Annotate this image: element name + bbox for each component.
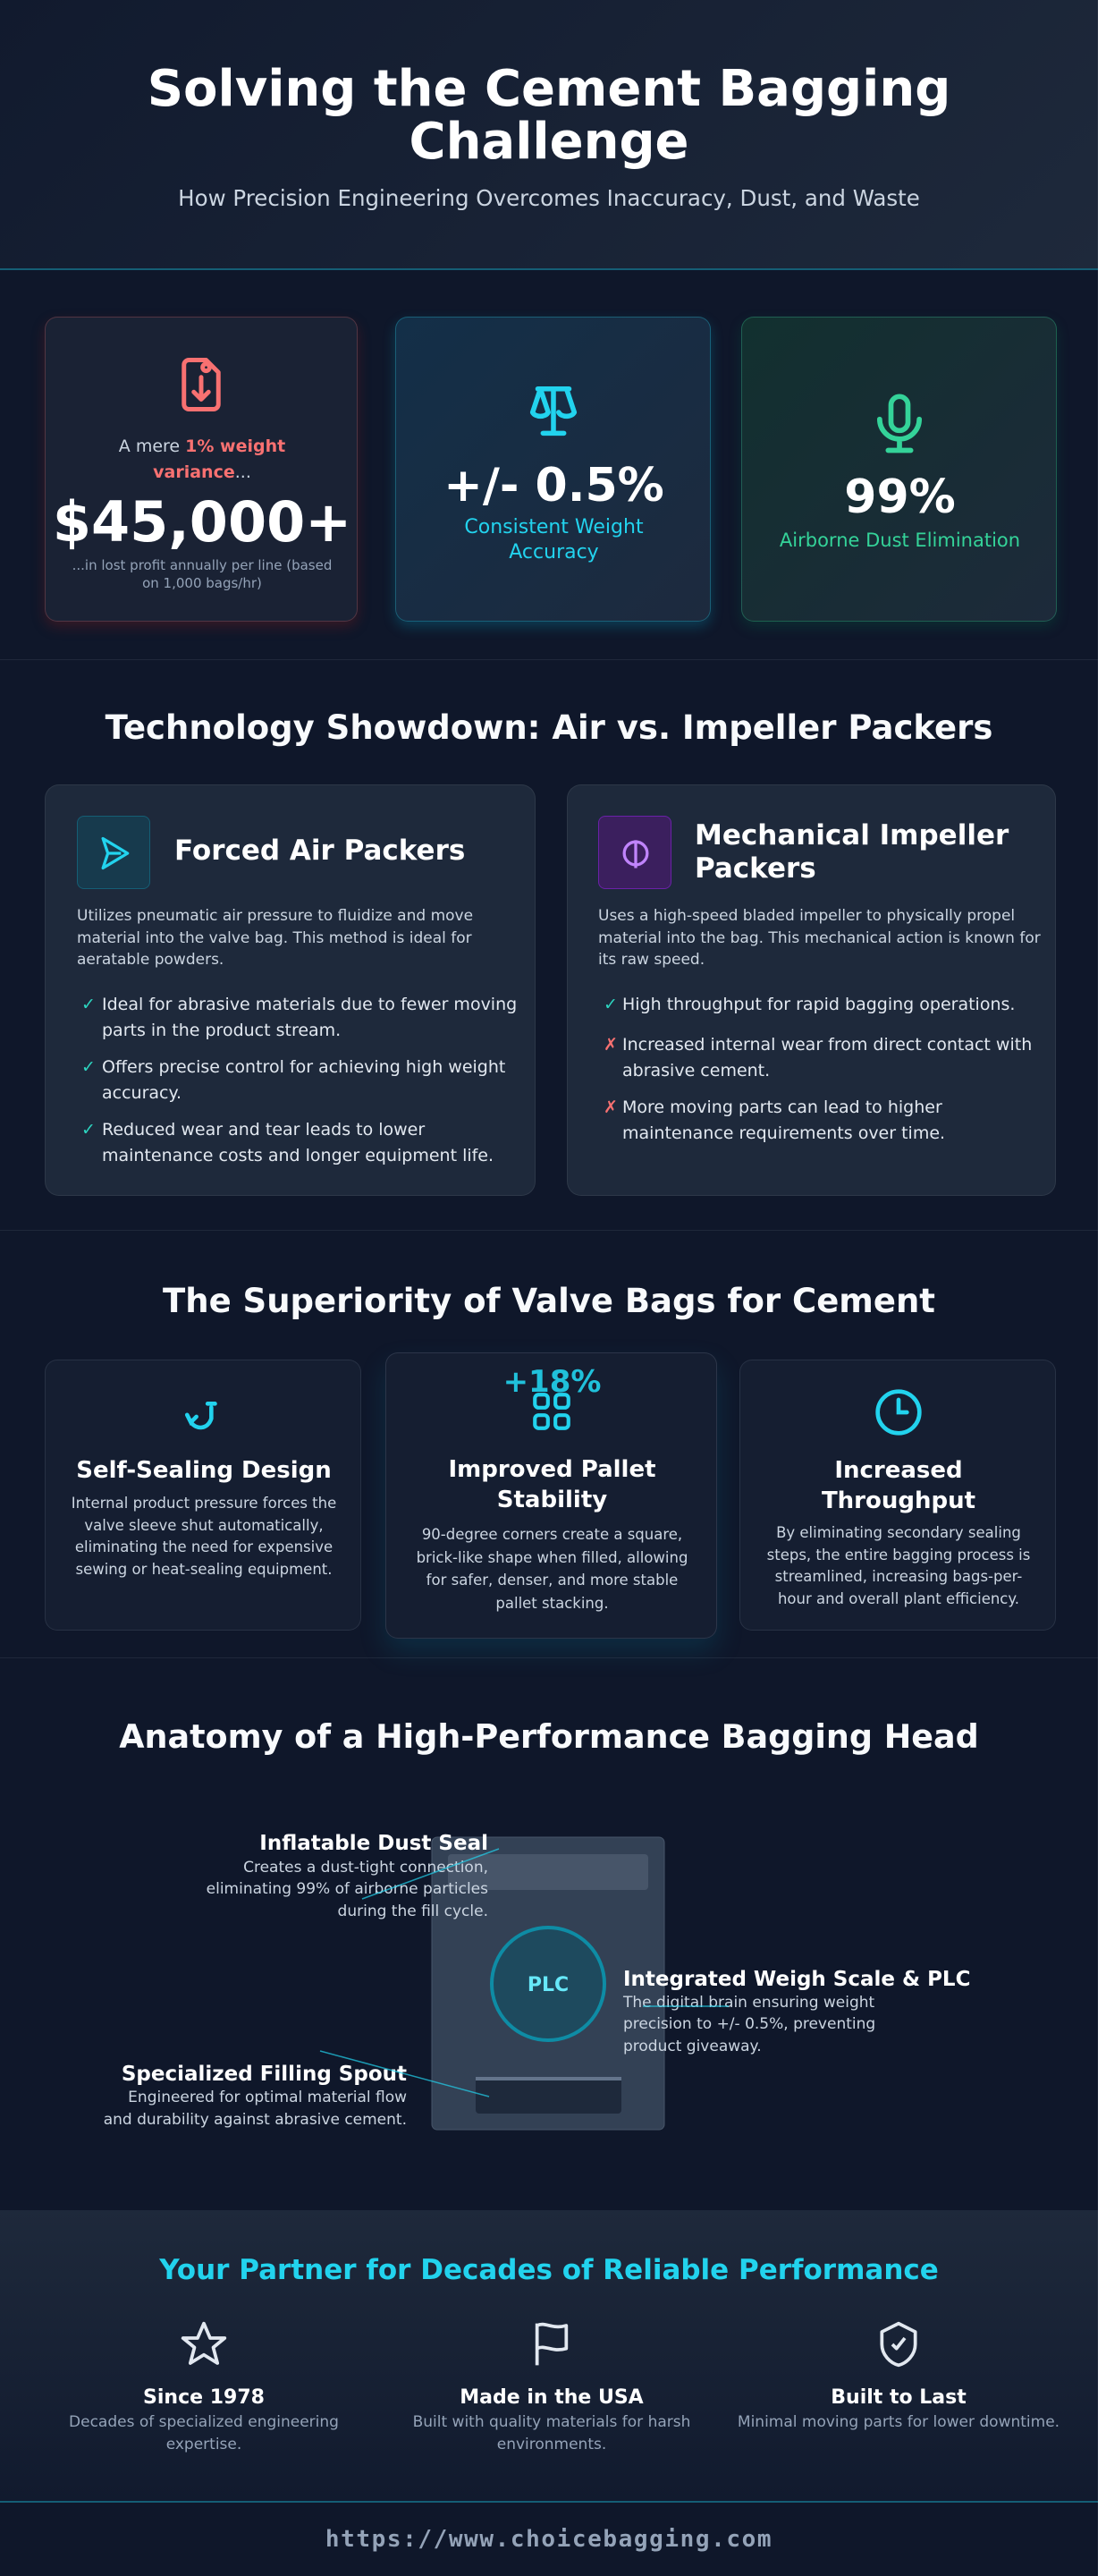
heading: Your Partner for Decades of Reliable Performance [159, 2254, 939, 2286]
icon: mic [877, 394, 922, 453]
panel: partner: Decades of specialized engineering [69, 2413, 339, 2431]
value: +/- 0.5% [443, 459, 664, 513]
description: material into the valve bag. This method is ideal for [77, 928, 472, 946]
panel: forced air [45, 784, 536, 1196]
item: built to last [738, 2322, 1060, 2431]
pros/cons list: ✓ [604, 995, 618, 1014]
footer url: https://www.choicebagging.com [325, 2526, 773, 2553]
icon: star [181, 2322, 227, 2365]
text: variance [118, 436, 285, 482]
pros list: ✓ [81, 995, 96, 1014]
description [77, 907, 473, 969]
description [598, 907, 1041, 969]
footnote [72, 557, 332, 591]
pros/cons list: High throughput for rapid bagging operations. [622, 995, 1015, 1014]
label: Airborne Dust Elimination [780, 530, 1020, 551]
description: Internal product pressure forces the [72, 1495, 336, 1512]
card: pallet stability [385, 1352, 717, 1639]
description: valve sleeve shut automatically, [84, 1517, 324, 1533]
item: since 1978 [69, 2322, 339, 2453]
panel: impeller [567, 784, 1056, 1196]
callout: dust seal [207, 1832, 499, 1920]
callout: filling spout: Specialized Filling Spout [122, 2063, 407, 2086]
footnote: on 1,000 bags/hr) [142, 575, 262, 591]
description: brick-like shape when filled, allowing [417, 1549, 688, 1565]
machine body [432, 1837, 664, 2130]
callout: weigh scale: precision to +/- 0.5%, preventing [623, 2015, 875, 2033]
subtitle: How Precision Engineering Overcomes Inaccuracy, Dust, and Waste [178, 185, 920, 211]
header band [0, 0, 1098, 270]
card: throughput [739, 1360, 1056, 1631]
pros/cons list: More moving parts can lead to higher [622, 1097, 942, 1117]
title: Forced Air Packers [174, 835, 465, 867]
title [448, 1456, 656, 1513]
callout: filling spout [104, 2051, 489, 2129]
panel: partner: Minimal moving parts for lower downtime. [738, 2413, 1060, 2431]
footnote: ...in lost profit annually per line (based [72, 557, 332, 573]
description: pallet stacking. [495, 1594, 609, 1612]
panel: partner: environments. [497, 2436, 606, 2453]
card: self-sealing [45, 1360, 361, 1631]
icon: impeller [598, 816, 671, 889]
description: Utilizes pneumatic air pressure to fluidize and move [77, 907, 473, 925]
icon: grid [533, 1393, 570, 1430]
label: Consistent Weight [464, 516, 644, 538]
description: By eliminating secondary sealing [776, 1524, 1021, 1541]
panel: partner: Built to Last [831, 2386, 967, 2409]
value: 99% [844, 470, 956, 524]
description: for safer, denser, and more stable [426, 1572, 678, 1589]
pros list: ✓ [81, 1120, 96, 1140]
title: Stability [497, 1487, 607, 1513]
callout: weigh scale [622, 1968, 970, 2055]
icon: shield [880, 2322, 917, 2367]
title: Improved Pallet [448, 1456, 656, 1483]
panel: partner: Built with quality materials for harsh [413, 2413, 690, 2431]
stat card: accuracy [395, 317, 711, 622]
title: Throughput [822, 1487, 975, 1514]
description: Uses a high-speed bladed impeller to physically propel [598, 907, 1015, 925]
description: eliminating the need for expensive [75, 1538, 333, 1555]
pros/cons list: maintenance requirements over time. [622, 1123, 945, 1143]
diagram: bagging head [104, 1832, 970, 2131]
text: variance: A mere 1% weight [119, 436, 285, 456]
icon: send [77, 816, 150, 889]
title [822, 1457, 975, 1514]
description: its raw speed. [598, 951, 705, 969]
callout: weigh scale: Integrated Weigh Scale & PLC [623, 1968, 970, 1991]
title: Solving the Cement Bagging [148, 60, 950, 118]
pros list: Offers precise control for achieving high weight [102, 1057, 505, 1077]
icon: file with arrow [182, 358, 221, 411]
text: variance: variance... [153, 462, 251, 482]
pros/cons list: ✗ [604, 1035, 618, 1055]
callout: filling spout: Engineered for optimal material flow [128, 2089, 407, 2106]
pros/cons list: ✗ [604, 1097, 618, 1117]
icon: scale [529, 386, 578, 436]
callout: dust seal: eliminating 99% of airborne particles [207, 1880, 488, 1898]
footer url [0, 2501, 1098, 2576]
description: hour and overall plant efficiency. [778, 1590, 1019, 1606]
label [464, 516, 644, 564]
pros list: parts in the product stream. [102, 1021, 341, 1040]
title: Self-Sealing Design [76, 1457, 332, 1484]
description [767, 1524, 1030, 1606]
heading: anatomy: Anatomy of a High-Performance Bagging Head [119, 1717, 979, 1756]
description [72, 1495, 336, 1578]
panel: partner [0, 2210, 1098, 2501]
description [417, 1526, 688, 1612]
pros/cons list: Increased internal wear from direct contact with [622, 1035, 1032, 1055]
panel: partner: expertise. [166, 2436, 241, 2453]
pros list: accuracy. [102, 1083, 182, 1103]
callout: filling spout: and durability against abrasive cement. [104, 2111, 407, 2129]
panel: partner: Since 1978 [143, 2386, 265, 2409]
machine body: PLC [528, 1974, 569, 1996]
panel: partner: Made in the USA [460, 2386, 644, 2409]
title [695, 819, 1009, 885]
stat card: dust [741, 317, 1057, 622]
pros list: ✓ [81, 1057, 96, 1077]
callout: dust seal: Creates a dust-tight connection, [243, 1859, 488, 1877]
description: material into the bag. This mechanical action is known for [598, 928, 1041, 946]
description: 90-degree corners create a square, [422, 1526, 682, 1543]
description: aeratable powders. [77, 951, 224, 969]
pros list: maintenance costs and longer equipment life. [102, 1146, 494, 1165]
title: Challenge [409, 113, 689, 171]
callout: weigh scale: The digital brain ensuring weight [622, 1994, 875, 2012]
icon: seal [185, 1402, 217, 1429]
pros list: Ideal for abrasive materials due to fewer moving [102, 995, 517, 1014]
callout: dust seal: during the fill cycle. [338, 1902, 488, 1920]
description: steps, the entire bagging process is [767, 1546, 1030, 1563]
pros/cons list [604, 995, 1032, 1143]
stat card: lost profit [45, 317, 358, 622]
description: streamlined, increasing bags-per- [775, 1568, 1022, 1585]
heading: valve bags: The Superiority of Valve Bags for Cement [163, 1282, 935, 1320]
title: Mechanical Impeller [695, 819, 1009, 852]
description: sewing or heat-sealing equipment. [75, 1560, 333, 1578]
label: Accuracy [509, 541, 599, 564]
icon: clock [875, 1389, 922, 1436]
big number: $45,000+ [53, 489, 351, 555]
pros list: Reduced wear and tear leads to lower [102, 1120, 425, 1140]
callout: dust seal: Inflatable Dust Seal [259, 1832, 488, 1855]
pros/cons list: abrasive cement. [622, 1061, 770, 1080]
title: Increased [834, 1457, 963, 1484]
pros list [81, 995, 517, 1165]
stat: +18%: +18% [503, 1364, 601, 1400]
title [148, 60, 950, 171]
callout: weigh scale: product giveaway. [623, 2038, 762, 2055]
icon: flag [535, 2322, 569, 2365]
heading: technology showdown: Technology Showdown: Air vs. Impeller Packers [106, 708, 992, 747]
title: Packers [695, 852, 816, 885]
item: made in usa [413, 2322, 690, 2453]
